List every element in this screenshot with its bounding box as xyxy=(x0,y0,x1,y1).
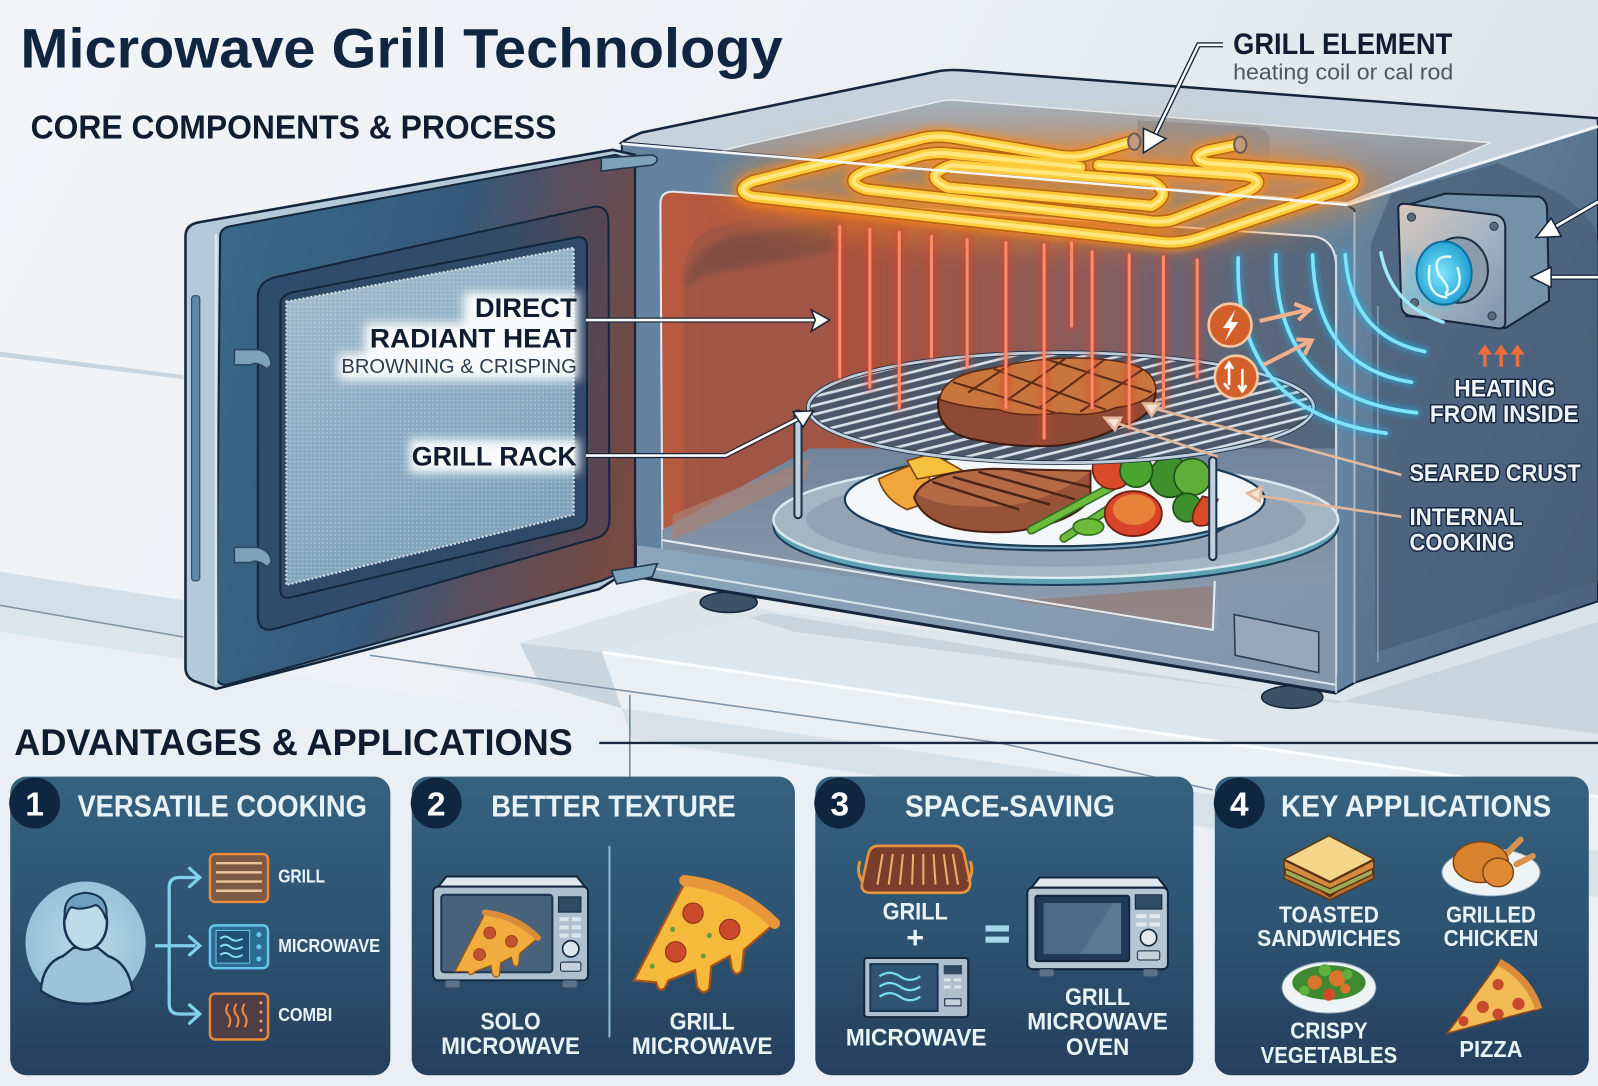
front bottom lip xyxy=(637,545,1336,693)
grill element coil xyxy=(743,136,1353,243)
label: grill microwave oven: OVEN xyxy=(1066,1034,1129,1061)
cavity left wall xyxy=(684,213,846,530)
icon: grill pan xyxy=(859,846,972,893)
panel 3: space-saving xyxy=(814,777,1193,1075)
heat rays xyxy=(840,226,1197,438)
label: combi: COMBI xyxy=(278,1004,332,1025)
badge 1: 1 xyxy=(25,786,44,823)
label: grill microwave oven: GRILL xyxy=(1065,984,1130,1011)
arrow: grill rack xyxy=(586,411,813,456)
arrow: radiant heat xyxy=(586,310,830,331)
equals sign xyxy=(986,925,1009,943)
panel 4 heading: KEY APPLICATIONS xyxy=(1281,789,1551,823)
door mesh window xyxy=(286,248,574,585)
icon: sandwich xyxy=(1284,836,1374,900)
subtitle: core components: CORE COMPONENTS & PROCESS xyxy=(31,110,556,147)
label: direct radiant heat: RADIANT HEAT xyxy=(370,324,577,354)
badge 4: 4 xyxy=(1230,786,1249,823)
door gasket xyxy=(258,207,609,630)
panel 2: better texture xyxy=(411,777,795,1075)
label: microwave: MICROWAVE xyxy=(278,935,380,956)
door inner face xyxy=(216,155,635,685)
panel 1 heading: VERSATILE COOKING xyxy=(77,789,367,823)
plus sign: + xyxy=(906,921,924,955)
cavity floor xyxy=(662,448,1336,673)
door window frame xyxy=(280,237,587,598)
arrow: heat to wave bottom xyxy=(1264,339,1312,365)
arrow: seared crust leaders xyxy=(1105,404,1401,475)
label: heating from inside: HEATING xyxy=(1454,375,1555,402)
badge 4 xyxy=(1214,778,1265,829)
label: grill microwave oven xyxy=(1027,984,1168,1061)
icon: combi mode xyxy=(210,994,268,1040)
icon: small microwave xyxy=(864,958,968,1017)
door hinge tabs xyxy=(234,350,271,567)
wave overlapping magnetron xyxy=(1381,253,1443,322)
badge 2 xyxy=(411,778,462,829)
label: internal cooking: COOKING xyxy=(1409,529,1514,556)
label: solo microwave: SOLO xyxy=(481,1008,541,1035)
panel 3 heading: SPACE-SAVING xyxy=(905,789,1115,823)
microwave door xyxy=(185,150,657,689)
upper steak xyxy=(938,358,1156,446)
label: crispy vegetables xyxy=(1261,1018,1397,1068)
microwave waves xyxy=(1238,255,1425,433)
icon: microwave mode xyxy=(210,925,268,968)
top inner recess xyxy=(713,100,1491,203)
icon: pizza xyxy=(1447,962,1539,1033)
label: crispy vegetables: VEGETABLES xyxy=(1261,1042,1397,1068)
magnetron unit xyxy=(1398,194,1549,329)
label: grilled chicken xyxy=(1444,901,1538,951)
label: direct radiant heat: BROWNING & CRISPING xyxy=(341,356,577,378)
label: microwave: MICROWAVE xyxy=(846,1025,987,1052)
door handle slot xyxy=(192,296,200,581)
label: heating from inside xyxy=(1430,375,1579,428)
panel 4: key applications xyxy=(1214,777,1589,1075)
label: direct radiant heat xyxy=(341,293,577,378)
title: Microwave Grill Technology xyxy=(20,16,783,79)
label: toasted sandwiches: TOASTED xyxy=(1279,901,1379,927)
door hinges xyxy=(601,155,657,584)
label: grill microwave: GRILL xyxy=(670,1008,735,1035)
top front edge xyxy=(622,144,1347,205)
label: grill: GRILL xyxy=(278,866,325,887)
microwave front frame xyxy=(622,143,1354,693)
arrows to modes xyxy=(155,868,200,1023)
arrows to magnetron xyxy=(1531,202,1598,287)
label: internal cooking xyxy=(1409,504,1523,556)
icon: lightning badge xyxy=(1209,304,1251,347)
icon: crispy vegetables xyxy=(1282,962,1376,1013)
icon: solo microwave with pizza xyxy=(433,876,588,988)
label: direct radiant heat: DIRECT xyxy=(475,293,577,323)
icon: three heat arrows xyxy=(1478,344,1525,367)
heat glow xyxy=(724,129,1376,248)
label: grill microwave: MICROWAVE xyxy=(632,1033,773,1060)
icon: user xyxy=(25,882,146,1004)
badge 2: 2 xyxy=(427,786,446,823)
coil terminals xyxy=(1128,134,1246,153)
front corner highlights xyxy=(1347,126,1598,205)
label: grill element xyxy=(1233,28,1453,84)
heading: advantages: ADVANTAGES & APPLICATIONS xyxy=(14,722,573,763)
plate xyxy=(845,453,1265,550)
microwave right side panel xyxy=(1336,126,1598,693)
label: toasted sandwiches xyxy=(1257,901,1401,951)
arrow: grill element xyxy=(1143,45,1223,153)
label: grill microwave xyxy=(632,1008,773,1060)
badge 1 xyxy=(9,778,60,829)
label: pizza: PIZZA xyxy=(1459,1036,1523,1062)
turntable xyxy=(774,462,1338,585)
control plate xyxy=(1234,615,1319,673)
label: toasted sandwiches: SANDWICHES xyxy=(1257,925,1401,951)
label: heating from inside: FROM INSIDE xyxy=(1430,401,1579,428)
label: grill microwave oven: MICROWAVE xyxy=(1027,1008,1168,1035)
lower steak xyxy=(914,469,1090,532)
microwave top panel xyxy=(622,70,1598,205)
white text halos xyxy=(338,292,579,473)
potato wedges xyxy=(878,454,963,510)
microwave illustration xyxy=(622,70,1598,708)
pizza in microwave xyxy=(455,912,538,977)
divider xyxy=(608,846,610,1037)
label: grill rack: GRILL RACK xyxy=(412,442,577,472)
badge 3 xyxy=(814,778,865,829)
grill rack xyxy=(798,353,1314,556)
microwave feet xyxy=(700,586,1576,708)
label: crispy vegetables: CRISPY xyxy=(1290,1018,1368,1044)
vegetables xyxy=(1031,448,1218,538)
label: solo microwave: MICROWAVE xyxy=(441,1033,580,1060)
icon: grilled chicken xyxy=(1442,840,1540,896)
label: grill: GRILL xyxy=(883,898,948,925)
label: internal cooking: INTERNAL xyxy=(1409,504,1523,531)
icon: combined microwave xyxy=(1027,877,1168,976)
icon: crispy pizza xyxy=(634,881,775,992)
icon: grill mode xyxy=(210,854,268,902)
panel 1: versatile cooking xyxy=(9,777,390,1075)
door outer edge xyxy=(185,150,635,689)
label: grill element: heating coil or cal rod xyxy=(1233,59,1453,84)
arrow: internal cooking leader xyxy=(1247,487,1401,517)
label: seared crust: SEARED CRUST xyxy=(1409,460,1581,487)
oven cavity xyxy=(660,192,1336,673)
panel 2 heading: BETTER TEXTURE xyxy=(491,789,736,823)
badge 3: 3 xyxy=(830,786,849,823)
icon: convection badge xyxy=(1215,356,1258,398)
arrow: heat to wave top xyxy=(1260,304,1310,321)
label: grill element: GRILL ELEMENT xyxy=(1233,28,1452,61)
label: grilled chicken: CHICKEN xyxy=(1444,925,1538,951)
label: solo microwave xyxy=(441,1008,580,1060)
label: grilled chicken: GRILLED xyxy=(1446,901,1536,927)
